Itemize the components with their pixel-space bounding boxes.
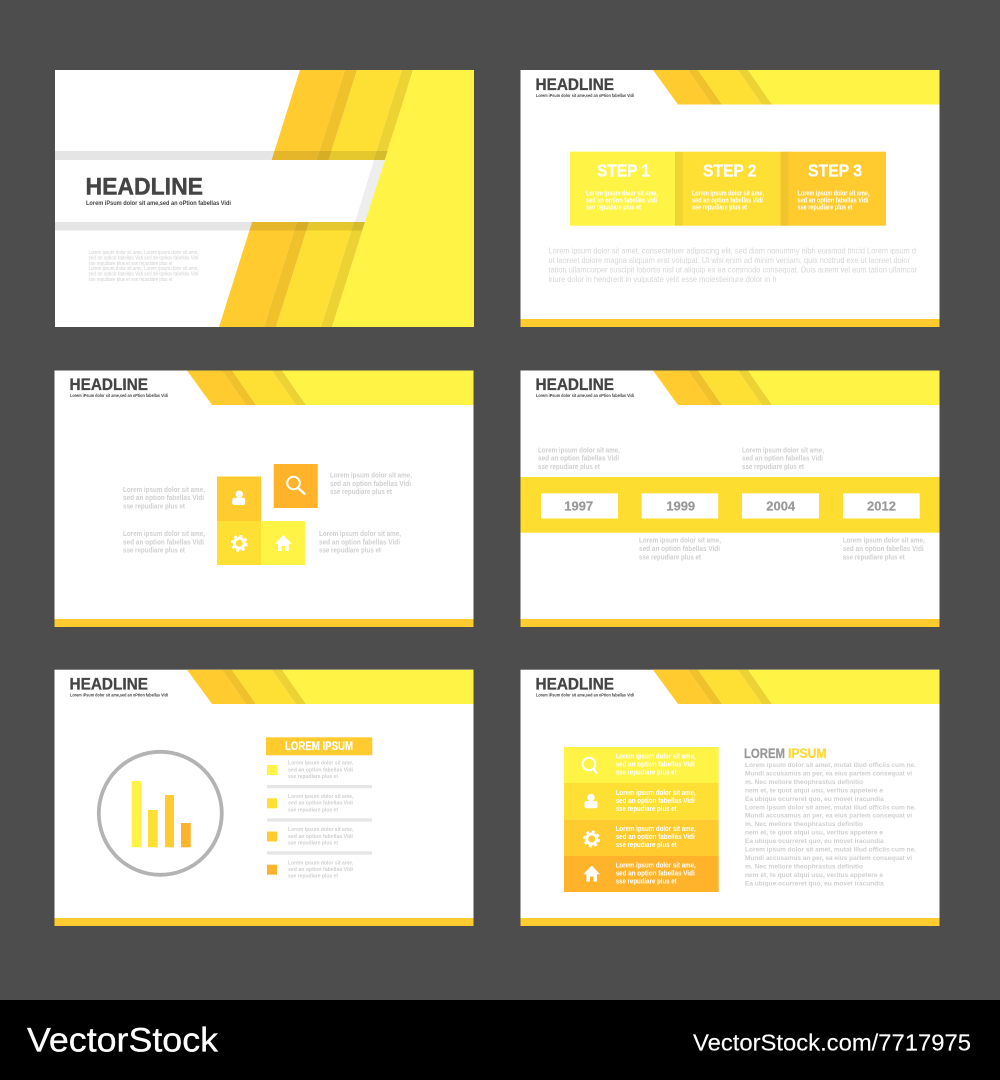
- brand name: VectorStock: [27, 1021, 219, 1059]
- list item 3: sse repudiare plus et: [288, 840, 338, 846]
- footer bar: [54, 619, 474, 627]
- text block: Mundi accusamus an per, ea eius partem consequat vi: [745, 855, 912, 862]
- step 1: sse repudiare plus et: [586, 205, 642, 212]
- step 2: STEP 2: [703, 161, 757, 181]
- heading: HEADLINE: [86, 173, 203, 200]
- list heading: [266, 737, 372, 755]
- diagonal colour stripes: [219, 70, 474, 327]
- title: lorem ipsum: LOREM: [744, 746, 785, 761]
- row: gear: [564, 820, 719, 856]
- text block: Lorem ipsum dolor sit amet, mutat illud officiis cum ne.: [745, 846, 916, 854]
- text: 2012: sed an option fabellas Vidi: [843, 546, 924, 553]
- text block: iriure dolor in hendrerit in vulputate velit esse molestieiriure dolor in h: [548, 274, 777, 284]
- text block: Lorem ipsum dolor sit ame, Lorem ipsum dolor sit ame,: [88, 266, 198, 272]
- text: right lower: [319, 531, 401, 554]
- row: gear: sse repudiare plus et: [616, 842, 677, 849]
- text block: Mundi accusamus an per, ea eius partem consequat vi: [745, 770, 912, 778]
- image reference: VectorStock.com/7717975: [693, 1030, 971, 1056]
- text: right lower: Lorem ipsum dolor sit ame,: [319, 531, 401, 538]
- text block: ut laoreet dolore magna aliquam erat volutpat. Ut wisi enim ad minim veniam, quis nostrud exe ut laoreet dolor: [548, 255, 910, 265]
- row: person: Lorem ipsum dolor sit ame,: [616, 790, 696, 797]
- step 3: Lorem ipsum dolor sit ame,: [798, 190, 870, 197]
- row: person: sse repudiare plus et: [616, 806, 677, 813]
- text: left upper: [123, 487, 205, 510]
- text: 2012: [843, 538, 925, 561]
- text block: tation ullamcorper suscipit lobortis nisl ut aliquip ex ea commodo consequat. Duis autem vel eum tation ullamcor: [548, 264, 917, 274]
- subheading: Lorem iPsum dolor sit ame,sed an oPtion fabellas Vidi: [536, 692, 634, 698]
- heading: HEADLINE: [536, 376, 614, 394]
- icon tile: person: [217, 476, 261, 521]
- text: 2012: sse repudiare plus et: [843, 554, 905, 561]
- list item 1: sse repudiare plus et: [288, 774, 338, 780]
- text: 1999: Lorem ipsum dolor sit ame,: [639, 538, 721, 545]
- panel: icon squares slide: [54, 370, 474, 627]
- text block: Lorem ipsum dolor sit ame, Lorem ipsum dolor sit ame,: [88, 250, 198, 256]
- text: 1997: Lorem ipsum dolor sit ame,: [538, 447, 620, 454]
- row: person: [564, 783, 719, 820]
- timeline band: [520, 477, 940, 533]
- subheading: Lorem iPsum dolor sit ame,sed an oPtion fabellas Vidi: [70, 393, 168, 399]
- text block: sed an option fabellas Vidi sed an option fabellas Vidi: [88, 256, 198, 262]
- text block: Ea ubique ocurreret quo, eu movet iracundia: [745, 796, 884, 803]
- text block: [88, 250, 198, 283]
- text: 1999: sed an option fabellas Vidi: [639, 546, 720, 553]
- step 1: [586, 161, 658, 212]
- text block: sse repudiare plus et sse repudiare plus et: [88, 277, 173, 283]
- list item 1: [267, 761, 354, 780]
- text: right upper: [330, 473, 412, 496]
- text: 1999: sse repudiare plus et: [639, 554, 702, 561]
- list item 2: sed an option fabellas Vidi: [288, 801, 353, 807]
- year 2004: [742, 493, 819, 518]
- year 2004: 2004: [766, 498, 796, 513]
- text: left upper: sed an option fabellas Vidi: [123, 495, 204, 502]
- header stripes: [653, 670, 940, 704]
- year 2012: 2012: [867, 498, 896, 513]
- panel: chart slide: [54, 670, 474, 926]
- subheading: Lorem iPsum dolor sit ame,sed an oPtion fabellas Vidi: [70, 692, 168, 698]
- text: left lower: [123, 531, 205, 554]
- step 3: STEP 3: [808, 161, 862, 181]
- list item 3: Lorem ipsum dolor sit ame,: [288, 827, 354, 833]
- year 1997: [541, 493, 618, 518]
- step 1: sed an option fabellas Vidi: [586, 198, 657, 204]
- list item 2: Lorem ipsum dolor sit ame,: [288, 794, 354, 800]
- step 2: sed an option fabellas Vidi: [692, 198, 763, 204]
- text: 2004: sed an option fabellas Vidi: [742, 456, 823, 463]
- step boxes: [570, 152, 886, 226]
- text: 2012: Lorem ipsum dolor sit ame,: [843, 538, 925, 545]
- year 2012: [843, 493, 920, 518]
- list item 4: Lorem ipsum dolor sit ame,: [288, 860, 354, 866]
- list item 4: sed an option fabellas Vidi: [288, 867, 353, 873]
- text: 2004: sse repudiare plus et: [742, 464, 805, 471]
- text: 2004: [742, 447, 824, 471]
- panel: cover slide: [55, 70, 474, 327]
- text: left lower: sse repudiare plus et: [123, 548, 186, 554]
- header stripes: [187, 370, 474, 405]
- list item 3: [267, 827, 354, 846]
- list item 3: sed an option fabellas Vidi: [288, 834, 353, 840]
- footer bar: [520, 319, 940, 327]
- heading: HEADLINE: [536, 76, 614, 94]
- row: search: [564, 747, 719, 783]
- step 3: [798, 161, 870, 212]
- list item 4: sse repudiare plus et: [288, 874, 338, 880]
- icon tile: home: [261, 521, 305, 565]
- list item 1: sed an option fabellas Vidi: [288, 767, 353, 773]
- row: search: sed an option fabellas Vidi: [616, 762, 695, 769]
- subheading: Lorem iPsum dolor sit ame,sed an oPtion fabellas Vidi: [86, 200, 231, 207]
- text block: Lorem ipsum dolor sit amet, mutat illud officiis cum ne.: [745, 762, 916, 769]
- text: 1999: [639, 538, 721, 561]
- panel: steps slide: [520, 70, 940, 327]
- text block: m. Nec meliore theophrastus definitio: [745, 863, 863, 870]
- step 3: sse repudiare plus et: [798, 205, 853, 212]
- list item 2: [267, 794, 354, 813]
- text: 2004: Lorem ipsum dolor sit ame,: [742, 447, 824, 454]
- row: search: Lorem ipsum dolor sit ame,: [616, 754, 696, 761]
- list heading: LOREM IPSUM: [285, 741, 353, 753]
- subheading: Lorem iPsum dolor sit ame,sed an oPtion fabellas Vidi: [536, 393, 634, 399]
- text: right upper: Lorem ipsum dolor sit ame,: [330, 473, 412, 480]
- text: left lower: Lorem ipsum dolor sit ame,: [123, 531, 205, 538]
- text block: Lorem ipsum dolor sit amet, consectetuer adipiscing elit, sed diam nonummy nibh euismod tincid Lorem ipsum d: [548, 246, 916, 256]
- text: 1997: sse repudiare plus et: [538, 464, 601, 471]
- row: search: sse repudiare plus et: [616, 770, 677, 777]
- panel: timeline slide: [520, 370, 940, 627]
- heading: HEADLINE: [70, 675, 148, 693]
- subheading: Lorem iPsum dolor sit ame,sed an oPtion fabellas Vidi: [536, 93, 634, 99]
- header stripes: [653, 370, 940, 405]
- text: left upper: Lorem ipsum dolor sit ame,: [123, 487, 205, 494]
- text: right lower: sse repudiare plus et: [319, 548, 382, 554]
- white headline band: [55, 151, 400, 230]
- text: left lower: sed an option fabellas Vidi: [123, 540, 204, 546]
- text: left upper: sse repudiare plus et: [123, 504, 186, 510]
- watermark bar: [0, 1000, 1000, 1080]
- icon tile: search: [274, 464, 318, 508]
- year 1999: [642, 493, 718, 518]
- footer bar: [54, 918, 474, 926]
- text block: m. Nec meliore theophrastus definitio: [745, 821, 863, 828]
- step 3: sed an option fabellas Vidi: [798, 198, 869, 204]
- text block: nem et, te quot atqui usu, veritus appetere e: [745, 830, 883, 837]
- icon tile: gear: [217, 521, 261, 565]
- text block: [548, 246, 917, 284]
- text block: m. Nec meliore theophrastus definitio: [745, 779, 863, 786]
- year 1999: 1999: [666, 498, 695, 513]
- step 2: Lorem ipsum dolor sit ame,: [692, 190, 764, 197]
- title: lorem ipsum: [744, 746, 826, 761]
- row: home: Lorem ipsum dolor sit ame,: [616, 862, 696, 869]
- footer bar: [520, 619, 940, 627]
- step 1: Lorem ipsum dolor sit ame,: [586, 190, 658, 197]
- row: person: sed an option fabellas Vidi: [616, 798, 695, 805]
- heading: HEADLINE: [70, 376, 148, 394]
- row: home: sse repudiare plus et: [616, 878, 677, 885]
- step 1: STEP 1: [597, 161, 650, 181]
- text block: sse repudiare plus et sse repudiare plus et: [88, 261, 173, 267]
- row: gear: Lorem ipsum dolor sit ame,: [616, 826, 696, 833]
- panel: list and text slide: [520, 670, 940, 926]
- list item 2: sse repudiare plus et: [288, 807, 338, 813]
- row: gear: sed an option fabellas Vidi: [616, 834, 695, 841]
- footer bar: [520, 918, 940, 926]
- step 2: sse repudiare plus et: [692, 205, 748, 212]
- text block: Lorem ipsum dolor sit amet, mutat illud officiis cum ne.: [745, 804, 916, 811]
- text block: nem et, te quot atqui usu, veritus appetere e: [745, 787, 883, 794]
- step 2: [692, 161, 764, 212]
- header stripes: [653, 70, 940, 104]
- text: right lower: sed an option fabellas Vidi: [319, 540, 400, 546]
- text block: Ea ubique ocurreret quo, eu movet iracundia: [745, 880, 884, 887]
- text: 1997: sed an option fabellas Vidi: [538, 456, 619, 463]
- text block: nem et, te quot atqui usu, veritus appetere e: [745, 872, 883, 879]
- heading: HEADLINE: [536, 675, 614, 693]
- text: right upper: sed an option fabellas Vidi: [330, 481, 411, 488]
- text block: sed an option fabellas Vidi sed an option fabellas Vidi: [88, 272, 198, 278]
- row: home: [564, 856, 719, 892]
- text block: [745, 762, 916, 887]
- list item 4: [267, 860, 354, 880]
- text: 1997: [538, 447, 620, 471]
- list item 1: Lorem ipsum dolor sit ame,: [288, 761, 354, 767]
- header stripes: [187, 670, 474, 704]
- text block: Mundi accusamus an per, ea eius partem consequat vi: [745, 813, 912, 820]
- text: right upper: sse repudiare plus et: [330, 489, 393, 496]
- text block: Ea ubique ocurreret quo, eu movet iracundia: [745, 838, 884, 845]
- title: lorem ipsum: IPSUM: [788, 746, 826, 761]
- bar chart in circle: [99, 752, 222, 875]
- row: home: sed an option fabellas Vidi: [616, 870, 695, 877]
- year 1997: 1997: [564, 498, 593, 513]
